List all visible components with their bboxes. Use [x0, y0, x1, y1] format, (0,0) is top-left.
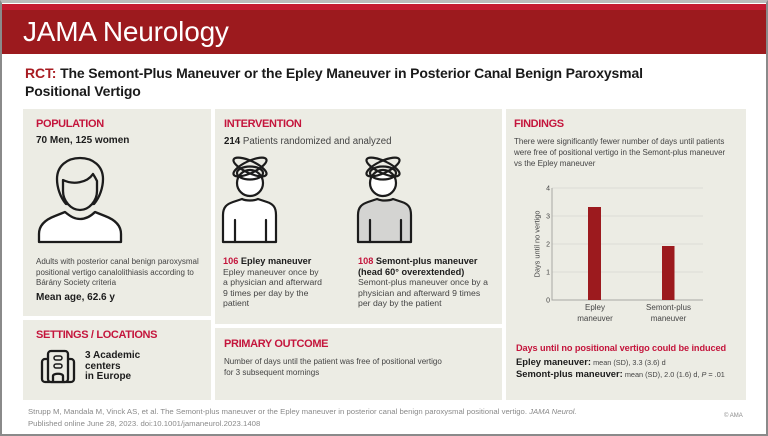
heading: findings: FINDINGS — [514, 118, 564, 130]
population description — [36, 257, 199, 287]
icon: patient semont — [356, 156, 412, 244]
population description: Bárány Society criteria — [36, 278, 116, 287]
settings text: 3 Academic — [85, 350, 140, 361]
findings text: were free of positional vertigo in the Semont-plus maneuver — [514, 148, 725, 157]
header top strip — [2, 4, 766, 10]
icon: patient epley — [222, 156, 278, 244]
semont arm text: physician and afterward 9 times — [358, 288, 480, 298]
bar chart: 1 — [546, 270, 550, 276]
results values — [516, 356, 725, 379]
bar chart: maneuver — [577, 314, 613, 323]
findings text: There were significantly fewer number of days until patients — [514, 137, 724, 146]
population description: Adults with posterior canal benign paroxysmal — [36, 257, 199, 266]
bar chart: Epley — [585, 303, 605, 312]
mean age: Mean age, 62.6 y — [36, 292, 115, 303]
semont arm text: (head 60° overextended) — [358, 267, 464, 277]
bar chart: Days until no vertigo — [532, 211, 542, 277]
panel: primary outcome — [215, 328, 502, 400]
patient count: 214 Patients randomized and analyzed — [224, 136, 392, 147]
bar chart: 3 — [546, 214, 550, 220]
header banner — [2, 4, 766, 54]
population description: positional vertigo canalolithiasis according to — [36, 268, 194, 277]
semont arm text: Semont-plus maneuver once by a — [358, 277, 488, 287]
results heading: Days until no positional vertigo could be induced — [516, 343, 726, 353]
epley arm text — [223, 256, 322, 308]
findings text — [514, 137, 726, 168]
epley arm text: 106 Epley maneuver — [223, 256, 311, 266]
epley arm text: patient — [223, 298, 249, 308]
heading: population: POPULATION — [36, 118, 104, 130]
bar chart: 0 — [546, 298, 550, 304]
results values: Epley maneuver: mean (SD), 3.3 (3.6) d — [516, 356, 666, 367]
panel: population — [23, 109, 211, 316]
epley arm text: 9 times per day by the — [223, 288, 308, 298]
title: RCT: The Semont-Plus Maneuver or the Epley Maneuver in Posterior Canal Benign Paroxysmal — [25, 65, 643, 81]
heading: intervention: INTERVENTION — [224, 118, 302, 130]
semont arm text — [358, 256, 488, 308]
citation — [28, 407, 577, 428]
journal name: JAMA Neurology — [23, 16, 229, 47]
copyright: © AMA — [724, 413, 743, 419]
settings text — [85, 350, 140, 382]
panel: intervention — [215, 109, 502, 324]
panel: settings / locations — [23, 320, 211, 400]
icon: building — [40, 350, 76, 384]
semont arm text: per day by the patient — [358, 298, 442, 308]
settings text: in Europe — [85, 371, 131, 382]
citation: Published online June 28, 2023. doi:10.1001/jamaneurol.2023.1408 — [28, 418, 260, 428]
title — [25, 65, 643, 99]
outcome text — [224, 357, 442, 377]
settings text: centers — [85, 361, 121, 372]
icon: woman — [38, 156, 122, 244]
outcome text: Number of days until the patient was free of positional vertigo — [224, 357, 442, 366]
semont arm text: 108 Semont-plus maneuver — [358, 256, 478, 266]
population counts: 70 Men, 125 women — [36, 135, 129, 146]
outcome text: for 3 subsequent mornings — [224, 368, 319, 377]
bar chart: 4 — [546, 186, 550, 192]
bar chart: 2 — [546, 242, 550, 248]
heading: primary outcome: PRIMARY OUTCOME — [224, 338, 328, 350]
bar chart — [532, 186, 703, 323]
findings text: vs the Epley maneuver — [514, 159, 595, 168]
epley arm text: a physician and afterward — [223, 277, 322, 287]
panel: findings — [506, 109, 746, 400]
title: Positional Vertigo — [25, 83, 141, 99]
bar chart: Semont-plus — [646, 303, 691, 312]
heading: settings: SETTINGS / LOCATIONS — [36, 329, 157, 341]
bar chart: maneuver — [651, 314, 687, 323]
results values: Semont-plus maneuver: mean (SD), 2.0 (1.6) d, P = .01 — [516, 368, 725, 379]
citation: Strupp M, Mandala M, Vinck AS, et al. The Semont-plus maneuver or the Epley maneuver in posterior canal benign paroxysmal positional vertigo. JAMA Neurol. — [28, 407, 577, 416]
epley arm text: Epley maneuver once by — [223, 267, 319, 277]
